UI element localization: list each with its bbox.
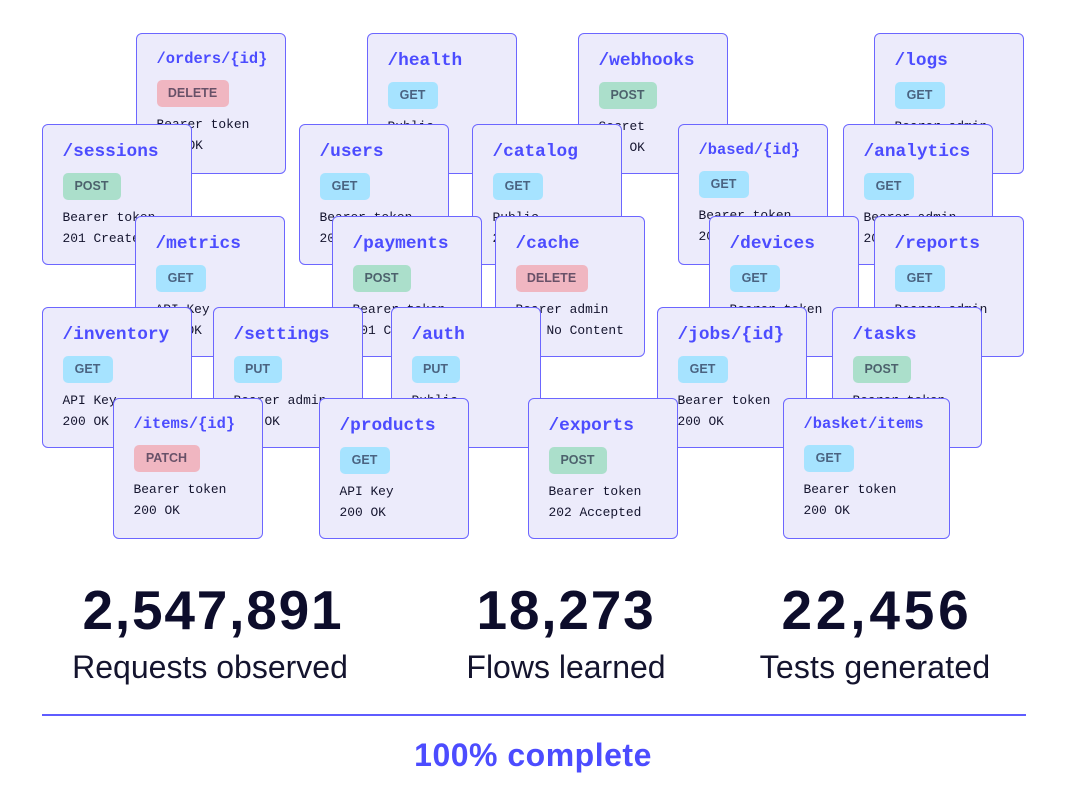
method badge: POST: POST bbox=[864, 362, 899, 376]
status: 200 OK bbox=[864, 231, 910, 246]
method badge: PATCH: PATCH bbox=[146, 450, 187, 464]
endpoint path: /settings bbox=[234, 324, 330, 344]
auth: API Key bbox=[62, 392, 117, 408]
card: /tasks bbox=[832, 307, 982, 448]
status: 200 OK bbox=[598, 140, 645, 155]
method badge: GET bbox=[804, 444, 854, 472]
auth: Public bbox=[412, 392, 458, 408]
endpoint path: /inventory bbox=[62, 324, 169, 344]
endpoint path: /payments bbox=[352, 234, 449, 254]
stat: tests generated label: Tests generated bbox=[760, 649, 990, 685]
auth: Bearer token bbox=[156, 116, 249, 132]
stat: requests observed number: 2,547,891 bbox=[83, 579, 343, 641]
method badge: GET: GET bbox=[816, 450, 841, 464]
status: 200 OK bbox=[412, 414, 458, 429]
status: 200 OK bbox=[492, 231, 539, 246]
card: /users bbox=[299, 124, 449, 265]
card: /jobs/{id} bbox=[657, 307, 807, 448]
auth: Bearer token bbox=[852, 392, 945, 408]
card: /reports bbox=[874, 216, 1024, 357]
status: 202 Accepted bbox=[548, 505, 641, 520]
stat: flows learned number: 18,273 bbox=[476, 579, 656, 641]
card: /basket/items bbox=[783, 398, 950, 539]
card: /sessions bbox=[42, 124, 192, 265]
method badge: GET bbox=[340, 446, 390, 474]
method badge: GET bbox=[894, 264, 944, 292]
status: 201 Created bbox=[852, 414, 938, 429]
stat: tests generated number: 22,456 bbox=[781, 579, 973, 641]
stat: requests observed label: Requests observed bbox=[72, 649, 348, 685]
method badge: POST: POST bbox=[74, 178, 109, 192]
card: /items/{id} bbox=[113, 398, 263, 539]
method badge: DELETE: DELETE bbox=[168, 86, 217, 100]
method badge: GET: GET bbox=[907, 270, 932, 284]
card: /products bbox=[319, 398, 469, 539]
endpoint path: /sessions bbox=[62, 142, 159, 162]
method badge: GET bbox=[698, 170, 748, 198]
endpoint path: /webhooks bbox=[598, 50, 695, 70]
auth: Bearer token bbox=[678, 392, 770, 408]
method badge: PUT: PUT bbox=[423, 362, 448, 376]
card: /devices bbox=[709, 216, 859, 357]
status: 201 Created bbox=[352, 323, 438, 338]
auth: Bearer admin bbox=[894, 302, 987, 316]
endpoint path: /basket/items bbox=[804, 414, 924, 432]
method badge: GET: GET bbox=[352, 452, 377, 466]
method badge: GET: GET bbox=[332, 178, 357, 192]
method badge: POST bbox=[548, 446, 606, 474]
card: /payments bbox=[332, 216, 482, 357]
status: 200 OK bbox=[156, 138, 203, 153]
auth: Bearer token bbox=[62, 210, 155, 224]
endpoint path: /metrics bbox=[156, 234, 241, 254]
method badge: GET bbox=[62, 356, 112, 382]
status: 200 OK bbox=[156, 323, 202, 338]
card: /logs bbox=[874, 33, 1024, 174]
card: /health bbox=[367, 33, 517, 174]
card: /inventory bbox=[42, 307, 192, 448]
status: 200 OK bbox=[340, 505, 386, 520]
method badge: GET: GET bbox=[75, 362, 100, 376]
method badge: GET: GET bbox=[168, 270, 193, 284]
status: 200 OK bbox=[730, 323, 776, 338]
status: 204 No Content bbox=[516, 323, 624, 338]
status: 201 Created bbox=[62, 231, 148, 246]
auth: Bearer token bbox=[804, 482, 896, 496]
card: /exports bbox=[528, 398, 678, 539]
method badge: POST: POST bbox=[610, 88, 645, 102]
method badge: GET: GET bbox=[505, 178, 530, 192]
card: /webhooks bbox=[578, 33, 728, 174]
method badge: GET bbox=[492, 172, 542, 200]
endpoint path: /reports bbox=[894, 234, 980, 254]
endpoint path: /analytics bbox=[864, 142, 970, 162]
auth: Bearer admin bbox=[234, 392, 326, 408]
auth: API Key bbox=[156, 302, 210, 316]
method badge: GET: GET bbox=[400, 88, 425, 102]
card: /metrics bbox=[135, 216, 285, 357]
endpoint path: /based/{id} bbox=[698, 140, 800, 158]
status: 200 OK bbox=[62, 414, 109, 429]
status: 200 OK bbox=[320, 231, 366, 246]
endpoint path: /orders/{id} bbox=[156, 50, 267, 68]
method badge: GET bbox=[320, 172, 370, 200]
method badge: GET bbox=[388, 82, 438, 108]
stat: flows learned label: Flows learned bbox=[466, 649, 666, 685]
card: /catalog bbox=[472, 124, 622, 265]
status: 200 OK bbox=[234, 414, 280, 429]
card: /auth bbox=[391, 307, 541, 448]
method badge: GET bbox=[156, 264, 206, 292]
method badge: GET: GET bbox=[907, 88, 932, 102]
endpoint path: /items/{id} bbox=[134, 414, 235, 432]
auth: Public bbox=[388, 118, 434, 134]
endpoint path: /cache bbox=[516, 234, 580, 254]
status: 200 OK bbox=[698, 229, 745, 244]
method badge: POST bbox=[852, 356, 910, 382]
endpoint path: /devices bbox=[730, 234, 815, 254]
endpoint path: /catalog bbox=[492, 142, 578, 162]
status: 200 OK bbox=[894, 140, 941, 155]
method badge: GET bbox=[678, 356, 728, 382]
method badge: PATCH bbox=[134, 444, 200, 472]
card: /cache bbox=[495, 216, 645, 357]
method badge: PUT bbox=[412, 356, 460, 382]
card: /settings bbox=[213, 307, 363, 448]
auth: Secret bbox=[598, 118, 645, 134]
auth: Bearer admin bbox=[864, 210, 956, 224]
status: 200 OK bbox=[804, 503, 850, 518]
method badge: GET: GET bbox=[742, 270, 767, 284]
method badge: DELETE bbox=[156, 80, 228, 106]
auth: Bearer admin bbox=[894, 118, 987, 134]
auth: Bearer admin bbox=[516, 302, 608, 316]
auth: Bearer token bbox=[134, 482, 226, 496]
method badge: DELETE: DELETE bbox=[527, 270, 576, 284]
endpoint path: /tasks bbox=[852, 324, 917, 344]
auth: Bearer token bbox=[548, 484, 641, 498]
card: /orders/{id} bbox=[136, 33, 286, 174]
method badge: POST: POST bbox=[364, 270, 399, 284]
auth: Public bbox=[492, 210, 539, 224]
status: 200 OK bbox=[134, 503, 180, 518]
auth: Bearer token bbox=[352, 302, 445, 316]
status: 200 OK bbox=[678, 414, 724, 429]
method badge: GET: GET bbox=[876, 178, 901, 192]
status: 200 OK bbox=[388, 140, 434, 155]
auth: Bearer token bbox=[320, 210, 412, 224]
progress label: 100% complete bbox=[414, 737, 652, 773]
progress line bbox=[42, 714, 1026, 716]
method badge: GET bbox=[864, 172, 914, 200]
method badge: GET: GET bbox=[711, 176, 736, 190]
card: /based/{id} bbox=[678, 124, 828, 265]
method badge: GET: GET bbox=[690, 362, 715, 376]
endpoint path: /users bbox=[320, 142, 384, 162]
endpoint path: /exports bbox=[548, 416, 634, 436]
method badge: PUT: PUT bbox=[245, 362, 270, 376]
method badge: PUT bbox=[234, 356, 282, 382]
endpoint path: /auth bbox=[412, 324, 465, 344]
endpoint path: /jobs/{id} bbox=[678, 324, 784, 344]
endpoint path: /logs bbox=[894, 50, 948, 70]
card: /analytics bbox=[843, 124, 993, 265]
method badge: DELETE bbox=[516, 264, 588, 292]
method badge: POST: POST bbox=[560, 452, 595, 466]
method badge: POST bbox=[352, 264, 410, 292]
endpoint path: /health bbox=[388, 50, 462, 70]
status: 200 OK bbox=[894, 323, 941, 338]
method badge: GET bbox=[894, 82, 944, 108]
method badge: POST bbox=[598, 82, 656, 108]
endpoint path: /products bbox=[340, 416, 436, 436]
method badge: POST bbox=[62, 172, 120, 200]
auth: Bearer token bbox=[730, 302, 822, 316]
method badge: GET bbox=[730, 264, 780, 292]
auth: Bearer token bbox=[698, 208, 791, 222]
auth: API Key bbox=[340, 484, 394, 498]
